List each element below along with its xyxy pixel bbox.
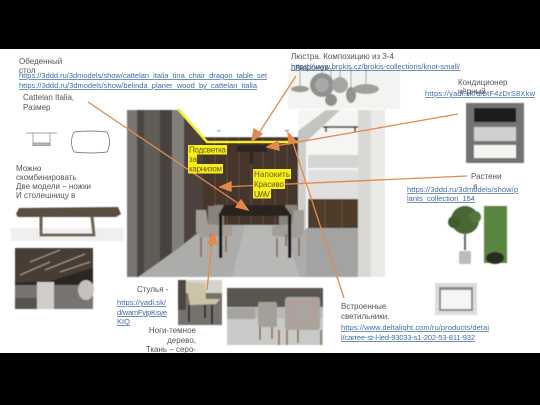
text: combine models bbox=[16, 164, 91, 200]
text: chairs: KIQ bbox=[117, 317, 130, 326]
orange arrows bbox=[88, 76, 467, 298]
text: chair materials bbox=[146, 326, 197, 354]
text: plants: https://3ddd.ru/3dmodels/show/p bbox=[407, 185, 518, 194]
yellow note: cornice lighting bbox=[188, 145, 227, 174]
text: plants: Растени bbox=[471, 172, 501, 181]
text: recessed lights: Встроенные bbox=[341, 302, 387, 311]
heading: dining table: стол bbox=[19, 66, 36, 75]
text: chair materials: Ноги-темное bbox=[149, 326, 197, 335]
arrow: plants bbox=[220, 176, 467, 191]
yellow note: veneer: Красиво bbox=[254, 180, 285, 189]
yellow note: veneer: UWV bbox=[254, 190, 271, 199]
yellow cornice line bbox=[178, 109, 298, 142]
arrow: chandelier bbox=[252, 76, 296, 141]
text: plants: я bbox=[473, 182, 477, 191]
arrow: table bbox=[88, 102, 248, 210]
text: chair materials: дерево, bbox=[167, 336, 196, 345]
text: brand and size: Cattelan Italia, bbox=[23, 93, 74, 102]
text: chairs: Стулья - bbox=[137, 285, 169, 294]
chairs bbox=[208, 205, 297, 234]
text: chairs: d/wamFyjpKsye bbox=[117, 308, 167, 317]
text: recessed lights: светильники. bbox=[341, 312, 389, 321]
yellow note: cornice lighting: Подсветка bbox=[189, 146, 227, 154]
air conditioner photo bbox=[466, 103, 524, 163]
text: chairs: https://yadi.sk/ bbox=[117, 298, 167, 307]
floor bbox=[127, 225, 360, 277]
chair photo bbox=[178, 280, 222, 325]
slide background bbox=[0, 49, 540, 353]
arrow: chairs bbox=[207, 233, 217, 290]
yellow note: veneer bbox=[253, 169, 291, 199]
text: combine models: И столешницу в bbox=[16, 191, 75, 200]
text: air conditioner: https://yadi.sk/d/btF4zDrS8Xkw bbox=[425, 89, 536, 98]
text: combine models: Две модели – ножки bbox=[16, 182, 91, 191]
back wall bbox=[203, 137, 298, 225]
text: air conditioner bbox=[425, 78, 536, 98]
heading: dining table bbox=[19, 57, 62, 75]
text: chair materials: Ткань – серо- bbox=[146, 345, 196, 354]
text: air conditioner: Кондиционер bbox=[458, 78, 508, 87]
arrow: recessed lights bbox=[288, 133, 344, 298]
yellow note: cornice lighting: карнизом bbox=[189, 164, 222, 174]
ceiling spots bbox=[217, 130, 221, 132]
text: recessed lights bbox=[341, 302, 489, 342]
text: air conditioner: чёрный bbox=[458, 87, 486, 96]
chair render photo bbox=[227, 288, 323, 345]
text: plants bbox=[407, 172, 518, 203]
text: brand and size: Размер bbox=[23, 103, 51, 112]
table links bbox=[19, 71, 268, 90]
table links: https://3ddd.ru/3dmodels/show/belinda_planer_wood_by_cattelan_italia bbox=[19, 81, 258, 90]
arrow: air conditioner bbox=[267, 114, 458, 150]
text: recessed lights: https://www.deltalight.com/ru/products/detai bbox=[341, 323, 489, 332]
text: chairs bbox=[117, 285, 169, 326]
text: brand and size bbox=[23, 93, 74, 112]
text: recessed lights: l/carree-st-l-led-93033-s1-202-53-811-932 bbox=[341, 333, 475, 342]
right kitchen bbox=[298, 110, 358, 228]
table links: https://3ddd.ru/3dmodels/show/cattelan_italia_tina_chair_dragon_table_set bbox=[19, 71, 268, 80]
yellow note: cornice lighting: за bbox=[189, 155, 198, 164]
text: chandelier: Люстра. Композицию из 3-4 bbox=[291, 52, 394, 61]
text: combine models: скомбинировать bbox=[16, 173, 77, 182]
chandelier photo bbox=[288, 68, 400, 109]
left wall bbox=[127, 110, 209, 277]
text: plants: lants_collection_154 bbox=[407, 194, 475, 203]
room render bbox=[127, 110, 385, 277]
table size drawings bbox=[26, 131, 110, 153]
recessed light photo bbox=[435, 283, 477, 315]
text: chandelier: https://www.brokis.cz/brokis-collections/knot-small/ bbox=[291, 62, 461, 71]
plants photo bbox=[448, 206, 507, 264]
text: chandelier bbox=[291, 52, 461, 72]
dining table bbox=[218, 205, 292, 216]
chandelier mount bbox=[237, 145, 267, 152]
text: chandelier: плафонов bbox=[291, 63, 329, 72]
table photo bbox=[11, 207, 124, 241]
text: combine models: Можно bbox=[16, 164, 42, 173]
heading: dining table: Обеденный bbox=[19, 57, 62, 66]
yellow note: veneer: Напокить bbox=[254, 170, 290, 179]
marble table photo bbox=[15, 248, 94, 309]
